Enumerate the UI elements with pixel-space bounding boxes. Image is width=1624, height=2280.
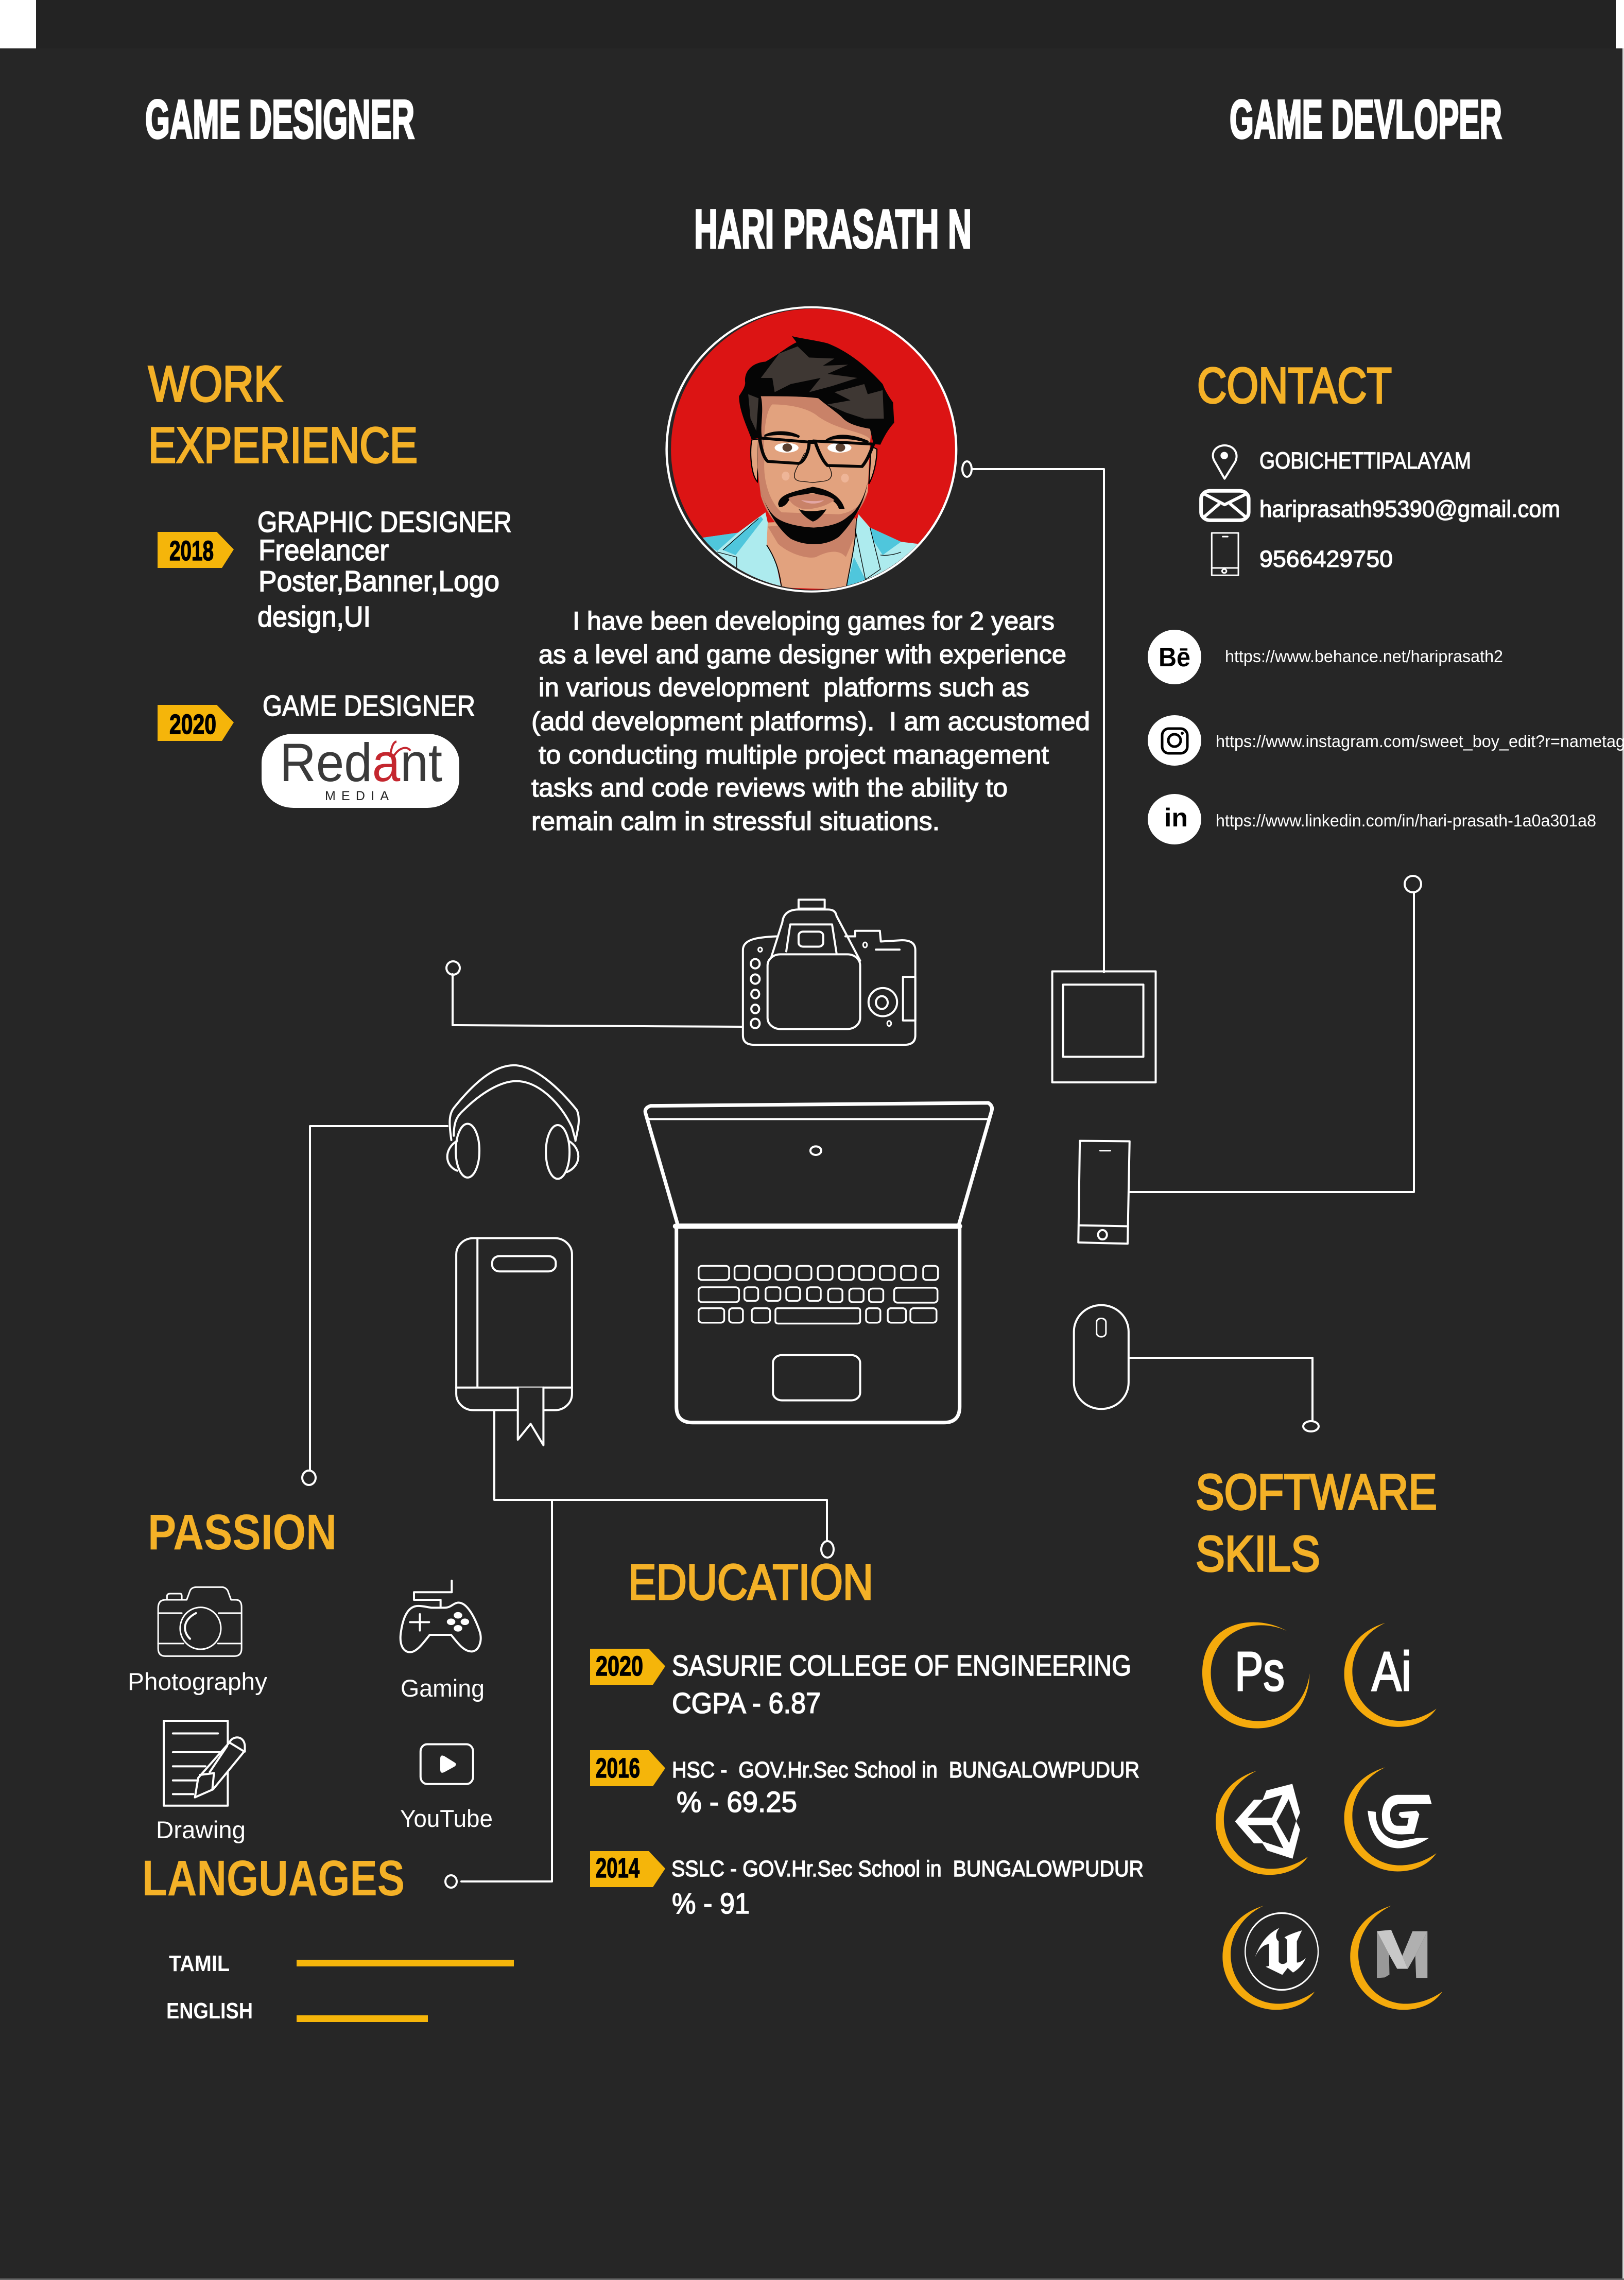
hsc: HSC - GOV.Hr.Sec School in BUNGALOWPUDUR [672,1757,1139,1783]
year tag 2018 [158,532,234,568]
year tag 2018: 2018 [169,536,214,566]
label: ai: Ai [1372,1640,1411,1702]
contact icons [1201,445,1249,575]
about paragraph: to conducting multiple project management [539,740,1049,769]
icon: g logo [1368,1795,1432,1849]
section: work experience [148,356,512,808]
icon: headphones [447,1065,579,1179]
about paragraph: as a level and game designer with experience [539,640,1066,669]
icon: smartphone [1078,1141,1130,1243]
icon: linkedin [1148,794,1201,844]
job: graphic designer: design,UI [257,600,371,633]
connector: mouse to software skills [1130,1358,1319,1431]
college: SASURIE COLLEGE OF ENGINEERING [672,1649,1131,1682]
heading: passion: PASSION [148,1504,337,1560]
sslc: SSLC - GOV.Hr.Sec School in BUNGALOWPUDUR [671,1856,1144,1881]
icon: gamepad [401,1581,481,1652]
software icons [1202,1622,1442,2010]
year tag 2020: 2020 [169,709,216,740]
icon: unity ring [1216,1771,1308,1875]
heading: skils: SKILS [1196,1526,1320,1582]
link: behance: https://www.behance.net/hariprasath2 [1225,647,1503,666]
icon: instagram [1148,715,1201,766]
job: graphic designer: GRAPHIC DESIGNER [257,506,512,539]
connector: book to education and languages [445,1411,834,1888]
job: graphic designer: Freelancer [258,534,389,567]
icon: linkedin: in [1164,803,1188,832]
job: graphic designer [257,506,512,633]
logo: redant media: Redant [280,733,442,793]
icon: photo camera [158,1587,241,1656]
label: gaming: Gaming [401,1674,485,1702]
year tag 2020: 2020 [596,1651,643,1682]
about paragraph: remain calm in stressful situations. [531,807,940,836]
about paragraph: in various development platforms such as [539,673,1029,702]
icon: illustrator ring [1344,1623,1437,1727]
year tag 2020 [158,705,234,741]
phone: 9566429750 [1259,546,1393,572]
about paragraph: I have been developing games for 2 years [573,607,1055,635]
icon: maya logo [1377,1930,1427,1978]
logo: redant media: MEDIA [325,789,389,803]
heading: experience: EXPERIENCE [148,417,418,473]
icon: youtube [421,1744,473,1784]
icon: behance: Bē [1159,643,1190,672]
heading: software: SOFTWARE [1196,1464,1437,1520]
location: GOBICHETTIPALAYAM [1259,447,1471,474]
year tag 2016: 2016 [596,1753,640,1784]
icon: tablet frame [1052,972,1155,1082]
line icons group [447,900,1155,1445]
portrait illustration [667,307,956,592]
section: contact [1148,357,1624,844]
college [672,1649,1131,1720]
about paragraph: (add development platforms). I am accustomed [531,707,1090,736]
icon: unreal ring [1222,1906,1315,2010]
heading: name: HARI PRASATH N [694,199,972,260]
language: english: ENGLISH [166,1998,253,2024]
connector: camera to top-left dot [446,961,742,1027]
icon: godot-style ring [1344,1767,1437,1871]
section: languages [142,1850,514,2024]
heading: game designer: GAME DESIGNER [145,89,414,150]
job: graphic designer: Poster,Banner,Logo [258,565,499,598]
sslc [671,1856,1144,1920]
icon: mouse [1074,1305,1129,1409]
section: passion [128,1504,493,1843]
year tag 2014: 2014 [596,1853,640,1884]
about paragraph [531,607,1090,836]
icon: laptop [645,1103,992,1423]
icon: unity logo [1235,1784,1300,1859]
hsc: % - 69.25 [677,1786,797,1819]
job: game designer: GAME DESIGNER [263,689,475,722]
hsc [672,1757,1139,1819]
icon: drawing [164,1721,245,1806]
connector: portrait to tablet [962,461,1104,972]
connectors [302,461,1421,1888]
section: education [590,1554,1144,1920]
sslc: % - 91 [672,1887,750,1920]
icon: maya ring [1350,1906,1442,2010]
heading: languages: LANGUAGES [142,1850,405,1906]
about paragraph: tasks and code reviews with the ability to [531,773,1008,802]
icon: behance [1148,630,1201,684]
logo: redant media [262,733,459,808]
icon: unreal logo [1245,1913,1318,1990]
email: hariprasath95390@gmail.com [1259,496,1560,522]
heading: work: WORK [148,356,283,412]
college: CGPA - 6.87 [672,1687,821,1720]
link: linkedin: https://www.linkedin.com/in/hari-prasath-1a0a301a8 [1216,811,1596,830]
icon: notebook [456,1238,572,1445]
language: tamil: TAMIL [169,1951,230,1976]
icon: dslr camera [743,900,915,1045]
label: photography: Photography [128,1668,267,1695]
passion icons [158,1581,481,1806]
language: tamil [169,1951,514,1976]
icon: photoshop ring [1202,1622,1309,1729]
language: english [166,1998,428,2024]
connector: headphones to passion [302,1126,447,1485]
link: instagram: https://www.instagram.com/sweet_boy_edit?r=nametag [1216,732,1624,751]
connector: phone to links [1130,876,1421,1192]
label: ps: Ps [1235,1640,1285,1702]
heading: contact: CONTACT [1197,357,1392,413]
label: youtube: YouTube [400,1805,493,1832]
heading: education: EDUCATION [628,1554,873,1610]
section: software skills [1196,1464,1442,2010]
label: drawing: Drawing [156,1816,246,1843]
